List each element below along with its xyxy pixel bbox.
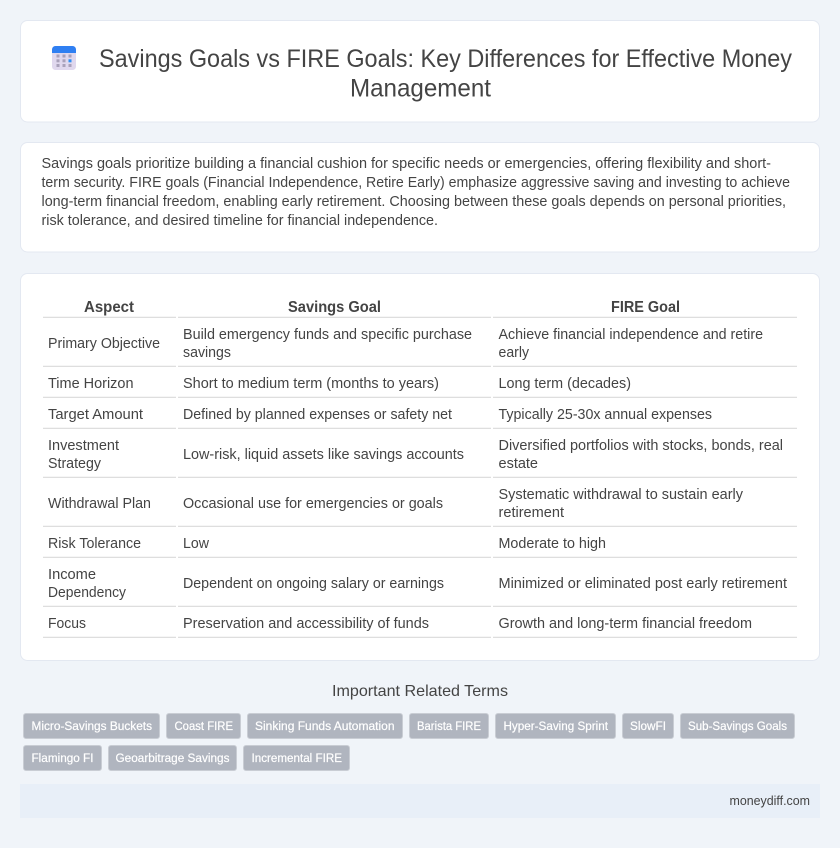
tag: Geoarbitrage Savings: Geoarbitrage Savings	[116, 751, 230, 765]
text block: summary paragraph: long-term financial freedom, enabling early retirement. Choosing between these goals depends on personal priorities,	[42, 194, 786, 210]
row: time horizon: Time Horizon	[48, 376, 134, 392]
row: primary objective: Achieve financial independence and retire	[498, 327, 763, 343]
row: risk tolerance: Moderate to high	[498, 536, 606, 552]
tag: Micro-Savings Buckets: Micro-Savings Buckets	[32, 719, 152, 733]
row: investment strategy: Strategy	[48, 456, 102, 472]
row: risk tolerance: Low	[183, 536, 210, 552]
row: risk tolerance: Risk Tolerance	[48, 536, 141, 552]
row: target amount: Typically 25-30x annual expenses	[498, 407, 712, 423]
tag: Sinking Funds Automation	[248, 714, 402, 738]
footer bar: moneydiff.com	[730, 793, 810, 808]
row: withdrawal plan	[43, 487, 797, 527]
panel: comparison table	[20, 274, 820, 660]
row: target amount: Target Amount	[48, 407, 143, 423]
text block: summary paragraph: risk tolerance, and desired timeline for financial independence.	[42, 213, 438, 229]
row: focus: Growth and long-term financial freedom	[498, 616, 752, 632]
row: focus: Preservation and accessibility of funds	[183, 616, 429, 632]
panel: header card	[20, 20, 820, 122]
row: time horizon: Long term (decades)	[498, 376, 631, 392]
tag: Incremental FIRE: Incremental FIRE	[252, 751, 342, 765]
text block: summary paragraph: Savings goals prioritize building a financial cushion for specific needs or emergencies, offering flexibility and short-	[42, 156, 771, 172]
tag: Barista FIRE: Barista FIRE	[417, 719, 481, 733]
tag: SlowFI	[622, 714, 674, 738]
row: withdrawal plan: retirement	[498, 505, 564, 521]
icon: calendar	[52, 46, 76, 70]
text block: summary paragraph: term security. FIRE goals (Financial Independence, Retire Early) emphasize aggressive saving and investing to achieve	[42, 175, 790, 191]
tag: Flamingo FI	[24, 746, 102, 770]
tag: Barista FIRE	[410, 714, 488, 738]
table header row: FIRE Goal	[611, 299, 680, 316]
row: income dependency: Income	[48, 567, 96, 583]
row: income dependency: Dependency	[48, 585, 127, 601]
row: target amount	[43, 407, 797, 429]
row: income dependency: Dependent on ongoing salary or earnings	[183, 576, 444, 592]
row: investment strategy	[43, 438, 797, 478]
row: target amount: Defined by planned expenses or safety net	[183, 407, 452, 423]
row: withdrawal plan: Withdrawal Plan	[48, 496, 151, 512]
tag: Flamingo FI: Flamingo FI	[32, 751, 94, 765]
panel: introduction	[20, 142, 820, 252]
tag list	[24, 714, 794, 770]
row: investment strategy: Diversified portfolios with stocks, bonds, real	[498, 438, 783, 454]
row: primary objective: savings	[183, 345, 231, 361]
tag: Hyper-Saving Sprint: Hyper-Saving Sprint	[504, 719, 609, 733]
row: focus	[43, 616, 797, 638]
row: primary objective: early	[498, 345, 530, 361]
footer bar	[20, 784, 820, 818]
title: Management	[350, 74, 491, 102]
row: primary objective	[43, 327, 797, 367]
title: Savings Goals vs FIRE Goals: Key Differences for Effective Money	[99, 45, 792, 73]
row: income dependency	[43, 567, 797, 607]
heading: important related terms: Important Related Terms	[332, 683, 508, 700]
tag: Incremental FIRE	[244, 746, 350, 770]
tag: Sub-Savings Goals: Sub-Savings Goals	[688, 719, 787, 733]
tag: Micro-Savings Buckets	[24, 714, 160, 738]
row: focus: Focus	[48, 616, 86, 632]
row: time horizon: Short to medium term (months to years)	[183, 376, 439, 392]
row: withdrawal plan: Occasional use for emergencies or goals	[183, 496, 443, 512]
row: time horizon	[43, 376, 797, 398]
table header row: Savings Goal	[288, 299, 381, 316]
row: primary objective: Build emergency funds and specific purchase	[183, 327, 472, 343]
text block: summary paragraph	[42, 156, 790, 229]
table header row: Aspect	[84, 299, 135, 316]
row: risk tolerance	[43, 536, 797, 558]
title	[99, 45, 792, 102]
row: primary objective: Primary Objective	[48, 336, 160, 352]
tag: Sinking Funds Automation: Sinking Funds Automation	[255, 719, 395, 733]
tag: Sub-Savings Goals	[680, 714, 794, 738]
row: investment strategy: estate	[498, 456, 538, 472]
tag: Geoarbitrage Savings	[108, 746, 236, 770]
row: investment strategy: Investment	[48, 438, 119, 454]
table header row	[43, 299, 797, 318]
row: investment strategy: Low-risk, liquid assets like savings accounts	[183, 447, 464, 463]
tag: Hyper-Saving Sprint	[496, 714, 616, 738]
tag: Coast FIRE: Coast FIRE	[174, 719, 233, 733]
tag: SlowFI: SlowFI	[630, 719, 666, 733]
row: withdrawal plan: Systematic withdrawal to sustain early	[498, 487, 744, 503]
row: income dependency: Minimized or eliminated post early retirement	[498, 576, 787, 592]
tag: Coast FIRE	[166, 714, 240, 738]
